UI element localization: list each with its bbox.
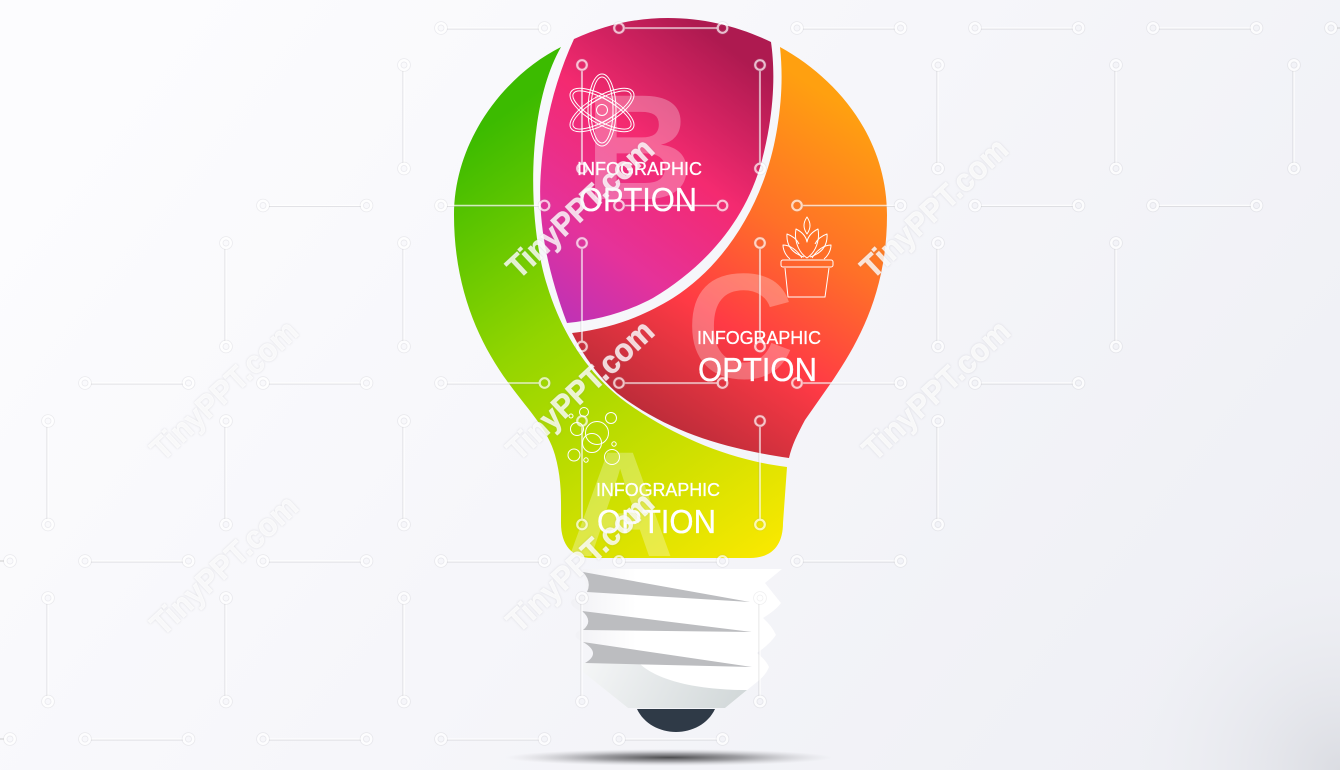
text block: option A: OPTION: [597, 503, 716, 540]
icon: bubbles: [568, 408, 620, 464]
text block: option C: OPTION: [698, 351, 817, 388]
watermarks: TinyPPT.com: [499, 313, 661, 467]
watermarks: TinyPPT.com: [855, 313, 1017, 467]
text block: option B: [577, 158, 702, 218]
light bulb: [454, 18, 887, 732]
screw base: [571, 569, 782, 708]
watermarks: TinyPPT.com: [143, 488, 305, 642]
ground shadow: [505, 749, 833, 766]
text block: option A: INFOGRAPHIC: [596, 479, 720, 500]
text block: option C: [697, 327, 821, 388]
letter C: C: [686, 242, 794, 410]
icon: potted plant: [781, 217, 833, 297]
text block: option A: [596, 479, 720, 540]
watermarks: TinyPPT.com: [499, 485, 661, 639]
text block: option B: OPTION: [579, 181, 697, 218]
watermarks: TinyPPT.com: [853, 131, 1015, 285]
text block: option C: INFOGRAPHIC: [697, 327, 821, 348]
panel: option C orange-red segment: [572, 47, 887, 458]
bulb contact cap: [637, 709, 715, 732]
watermarks: TinyPPT.com: [499, 131, 661, 285]
letter A: A: [566, 420, 674, 588]
watermarks: TinyPPT.com: [143, 313, 305, 467]
letter B: B: [585, 63, 693, 231]
panel: option B pink segment: [540, 18, 773, 323]
icon: atom: [564, 74, 640, 146]
text block: option B: INFOGRAPHIC: [577, 158, 702, 179]
panel: option A green-yellow segment: [454, 47, 787, 558]
watermarks: [143, 131, 1017, 642]
